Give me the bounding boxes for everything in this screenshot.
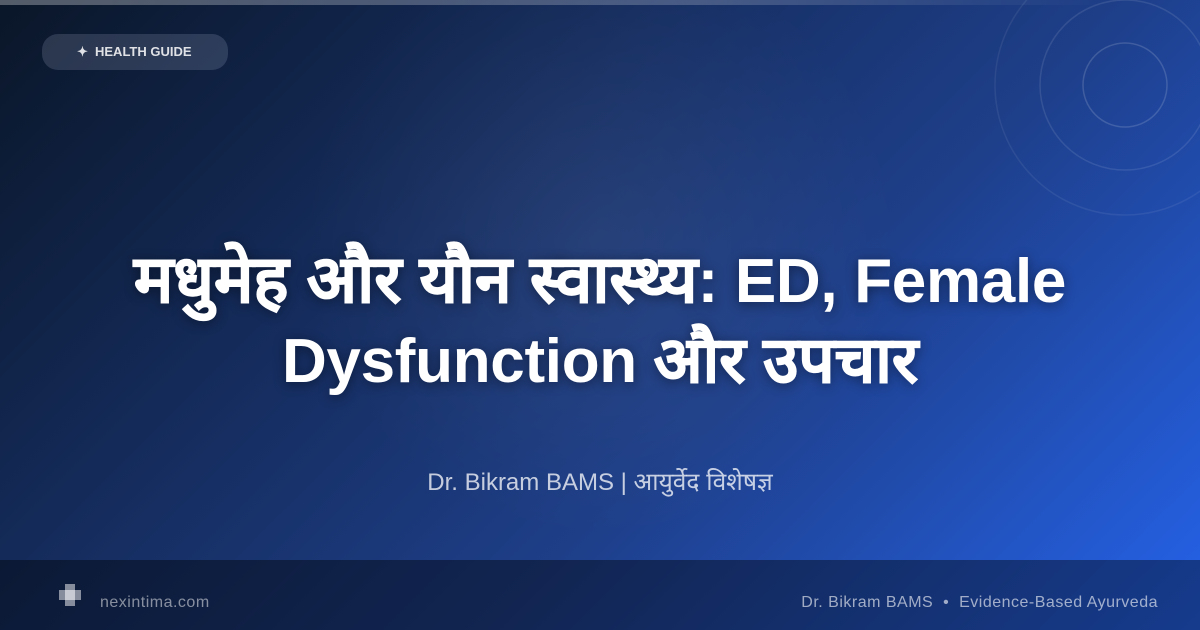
top accent bar xyxy=(0,0,1200,5)
title: मधुमेह और यौन स्वास्थ्य: ED, Female xyxy=(134,242,1066,316)
badge label: HEALTH GUIDE xyxy=(95,44,192,59)
icon: plus logo xyxy=(59,584,81,606)
footer bar xyxy=(0,560,1200,630)
decorative concentric circles xyxy=(994,0,1200,216)
icon: sparkle: ✦ xyxy=(77,44,88,59)
footer credit: Dr. Bikram BAMS • Evidence-Based Ayurveda xyxy=(801,594,1158,611)
footer site name: nexintima.com xyxy=(100,594,210,611)
author subtitle: Dr. Bikram BAMS | आयुर्वेद विशेषज्ञ xyxy=(427,469,773,496)
badge: health guide xyxy=(42,34,228,70)
title xyxy=(132,240,1070,400)
title: Dysfunction और उपचार xyxy=(282,324,918,396)
